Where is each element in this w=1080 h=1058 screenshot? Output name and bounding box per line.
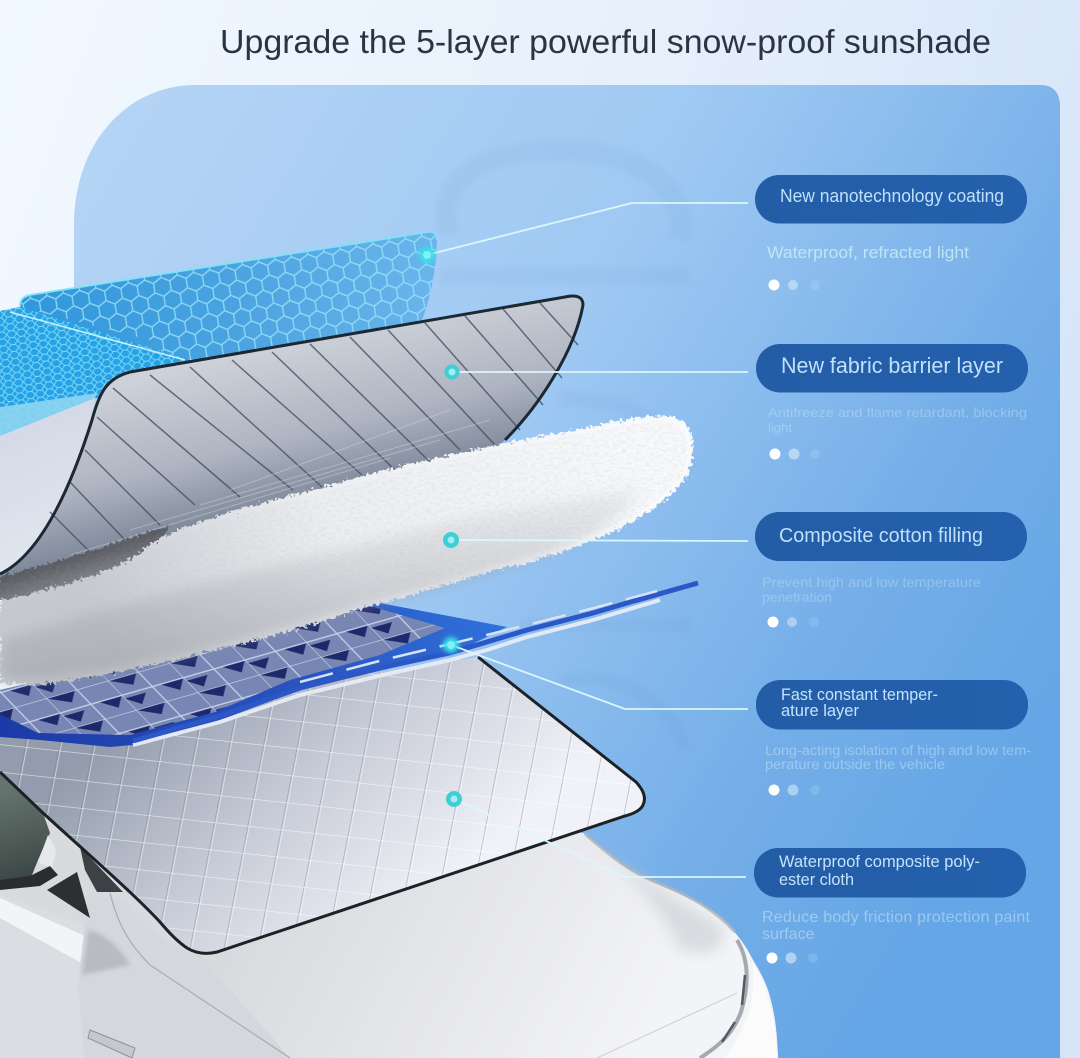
pill heading: ature layer [781, 702, 859, 720]
illustration: car [0, 770, 778, 1058]
marker 1 [419, 247, 435, 263]
callout 1 [755, 175, 1027, 290]
title: Upgrade the 5-layer powerful snow-proof sunshade [220, 24, 991, 61]
cotton body [0, 416, 693, 684]
pill heading: New nanotechnology coating [780, 186, 1004, 206]
cloth fill [0, 657, 644, 953]
pill heading: Fast constant temper- [781, 686, 938, 704]
pill heading: Composite cotton filling [779, 525, 983, 547]
dense woven section [0, 307, 190, 436]
dense fill [0, 307, 190, 407]
cotton fibre texture [0, 421, 687, 679]
description line 2: perature outside the vehicle [765, 757, 945, 772]
pale lower band [0, 393, 97, 436]
honeycomb bright top edge [20, 232, 437, 306]
front fender [725, 962, 778, 1058]
layer 1: nanotechnology honeycomb coating [0, 232, 437, 436]
description line 2: surface [762, 926, 815, 943]
watermark: faint ghost shapes [440, 150, 690, 750]
honeycomb fill [0, 232, 437, 436]
window triangle [47, 872, 90, 918]
mesh blue base [0, 603, 507, 747]
pagination dots [770, 448, 820, 460]
mirror base [0, 866, 58, 890]
mesh blue edge [133, 583, 698, 741]
cloth quilting grid [0, 657, 644, 953]
layer 5: waterproof composite polyester cloth [0, 657, 644, 953]
sheet diagonal quilting [50, 303, 578, 552]
callout 2 [756, 344, 1028, 460]
sheet silver surface [0, 296, 583, 600]
sheet light cross seams [70, 410, 490, 555]
callout 4 [756, 680, 1031, 796]
hood seam [110, 893, 290, 1058]
pill heading: Waterproof composite poly- [779, 853, 980, 871]
callout 3 [755, 512, 1027, 628]
connector lines [427, 203, 748, 877]
cotton lower shading [0, 490, 640, 681]
description: Prevent high and low temperature [762, 574, 981, 590]
pagination dots [768, 616, 819, 628]
sheet dark edge [0, 296, 583, 574]
pagination dots [768, 280, 820, 290]
layer 4: fast constant temperature mesh [0, 583, 698, 747]
pagination dots [766, 952, 818, 964]
description: Waterproof, refracted light [767, 243, 969, 262]
A-pillar panel [78, 895, 290, 1058]
pill heading: ester cloth [779, 871, 854, 889]
mesh light edge dashes [300, 591, 657, 682]
layer 3: composite cotton filling [0, 416, 693, 684]
pill heading [755, 175, 1027, 224]
hood outer edge stripe [585, 834, 735, 932]
headlight [700, 940, 747, 1058]
pill heading [755, 512, 1027, 561]
door handle [88, 1030, 135, 1058]
dark A-pillar strip [80, 847, 123, 892]
pagination dots [768, 784, 820, 796]
layer 2: fabric barrier sheet [0, 296, 583, 600]
connector 3 [451, 540, 748, 541]
pill heading: New fabric barrier layer [781, 353, 1003, 378]
callout 5 [754, 848, 1031, 964]
description: Long-acting isolation of high and low tem- [765, 743, 1031, 758]
connector 2 [452, 371, 748, 373]
marker 5 [446, 791, 462, 807]
honeycomb fold highlight [10, 312, 185, 360]
car body [0, 770, 778, 1058]
marker 2 [444, 364, 460, 380]
description line 2: light [768, 420, 792, 435]
cotton shadowed fur [0, 525, 170, 622]
marker 3 [443, 532, 459, 548]
description line 2: penetration [762, 589, 832, 605]
marker dots [419, 247, 462, 807]
connector 4 [451, 645, 748, 709]
pill heading [756, 680, 1028, 730]
hood shoulder crease [590, 838, 724, 953]
hood front seam [597, 993, 737, 1058]
pillar shadow [82, 930, 130, 975]
pill heading [756, 344, 1028, 392]
front door panel [0, 895, 85, 1058]
headlight dark details [722, 975, 745, 1042]
honeycomb cells [20, 232, 437, 400]
cloth black edge [0, 657, 644, 953]
description: Antifreeze and flame retardant, blocking [768, 405, 1027, 420]
mesh white edge [133, 600, 660, 745]
side window and mirror [0, 772, 50, 880]
dense cells [0, 307, 190, 436]
mirror chrome [38, 835, 56, 868]
connector 5 [454, 799, 746, 877]
pill heading [754, 848, 1026, 898]
sheet reverse side [0, 398, 95, 574]
marker 4 [443, 637, 459, 653]
connector 1 [427, 203, 748, 255]
mesh lattice [0, 606, 445, 735]
door highlight [0, 898, 85, 965]
description: Reduce body friction protection paint [762, 909, 1031, 926]
